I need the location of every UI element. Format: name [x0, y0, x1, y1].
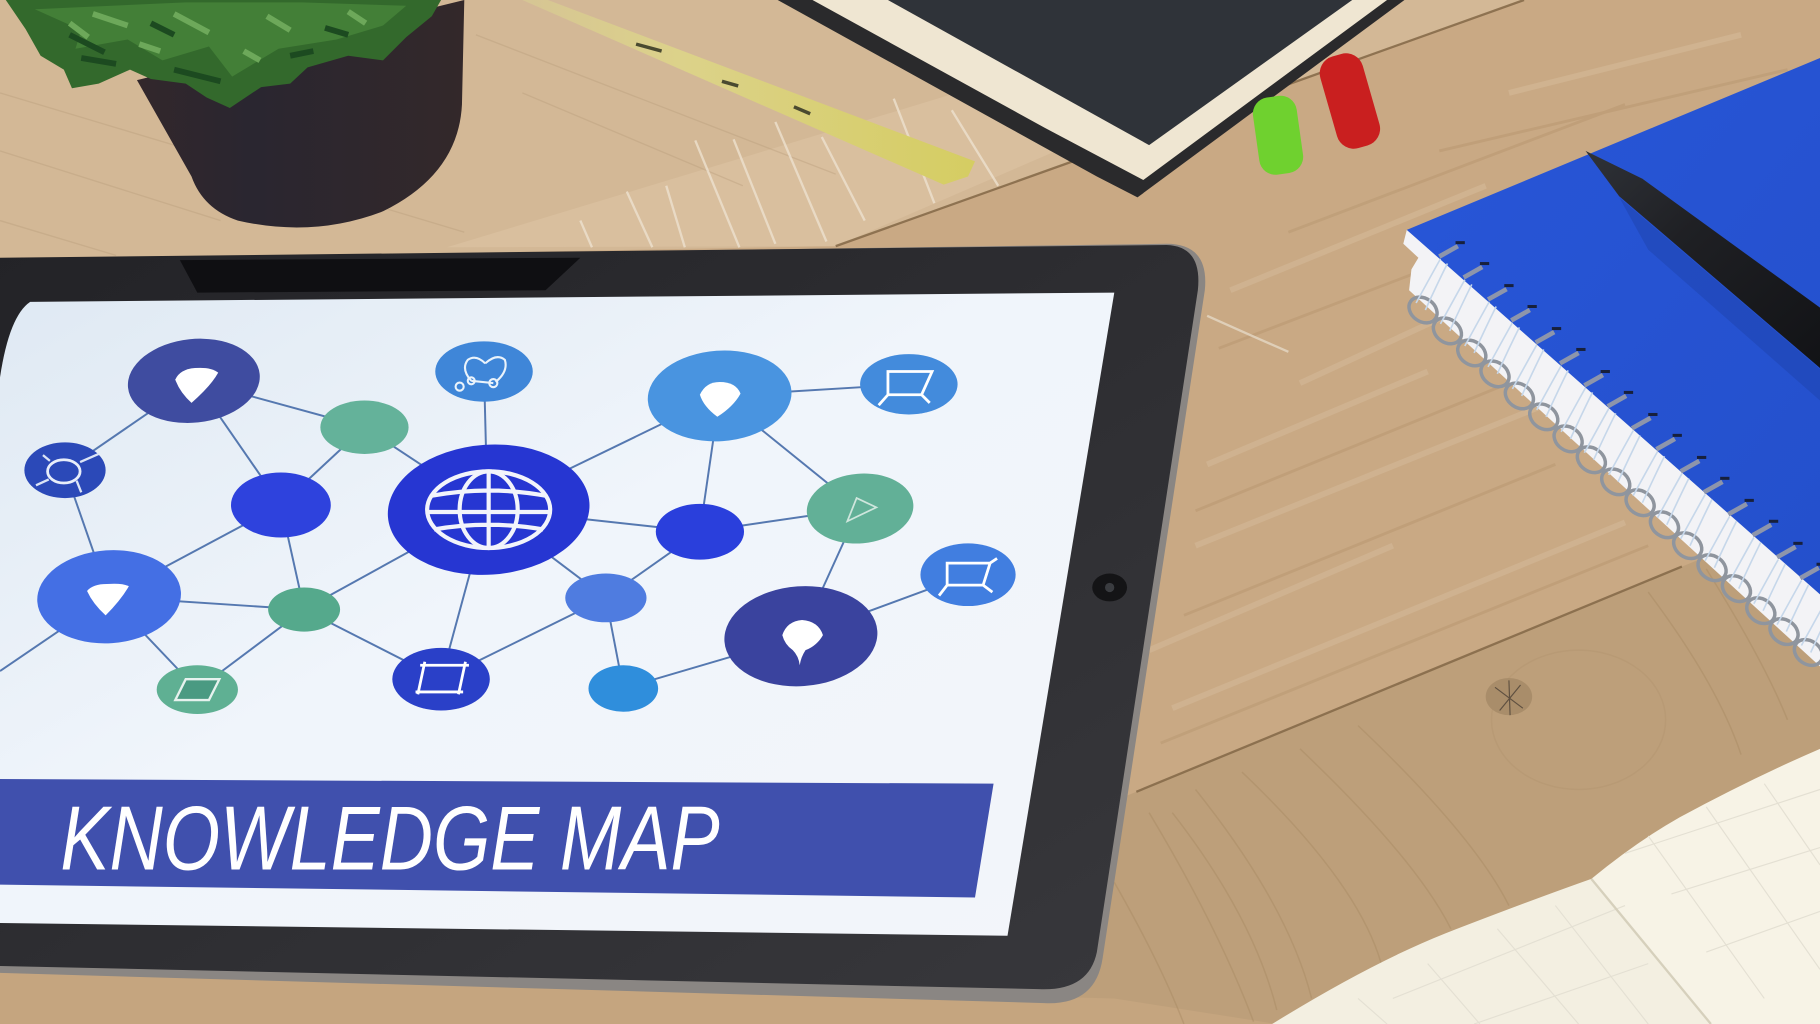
title banner: [0, 779, 994, 897]
open notebook: [1272, 749, 1820, 1024]
node: small blue: [565, 574, 647, 622]
node: green top: [320, 401, 409, 454]
node: right frame: [920, 543, 1016, 606]
green marker: [1251, 94, 1305, 177]
node: top centre pin: [645, 346, 795, 446]
camera: [1092, 574, 1127, 601]
title text: KNOWLEDGE MAP: [60, 789, 720, 890]
node: blue mid-left: [231, 473, 331, 538]
screen: [0, 293, 1114, 936]
pot: [137, 0, 464, 227]
tablet: [0, 244, 1205, 1003]
connector lines: [0, 372, 968, 690]
red marker: [1316, 49, 1384, 153]
ruler: [522, 0, 975, 185]
cover: [1407, 58, 1820, 594]
spiral binding: [1404, 243, 1820, 671]
paper block: [1403, 230, 1820, 666]
node: heart icon: [435, 341, 533, 402]
node: central globe: [383, 438, 594, 582]
node: blue mid-right: [656, 504, 744, 560]
black pen: [1586, 151, 1820, 368]
node: green square: [157, 665, 238, 714]
foliage: [6, 0, 441, 108]
reflection: [180, 258, 580, 293]
tablet bezel: [0, 244, 1205, 1003]
node: blue frame: [392, 648, 490, 711]
node: top-right frame: [860, 354, 958, 414]
black notebook: [778, 0, 1404, 197]
node: small cyan: [588, 665, 658, 712]
blue spiral notebook: [1403, 58, 1820, 671]
node: large left pin: [34, 545, 184, 648]
node: large navy pin: [721, 581, 881, 691]
potted plant: [6, 0, 464, 227]
node: green play: [804, 469, 916, 548]
node: top-left pin: [124, 332, 264, 429]
node: left target: [24, 442, 106, 498]
node: green bottom: [268, 587, 340, 632]
